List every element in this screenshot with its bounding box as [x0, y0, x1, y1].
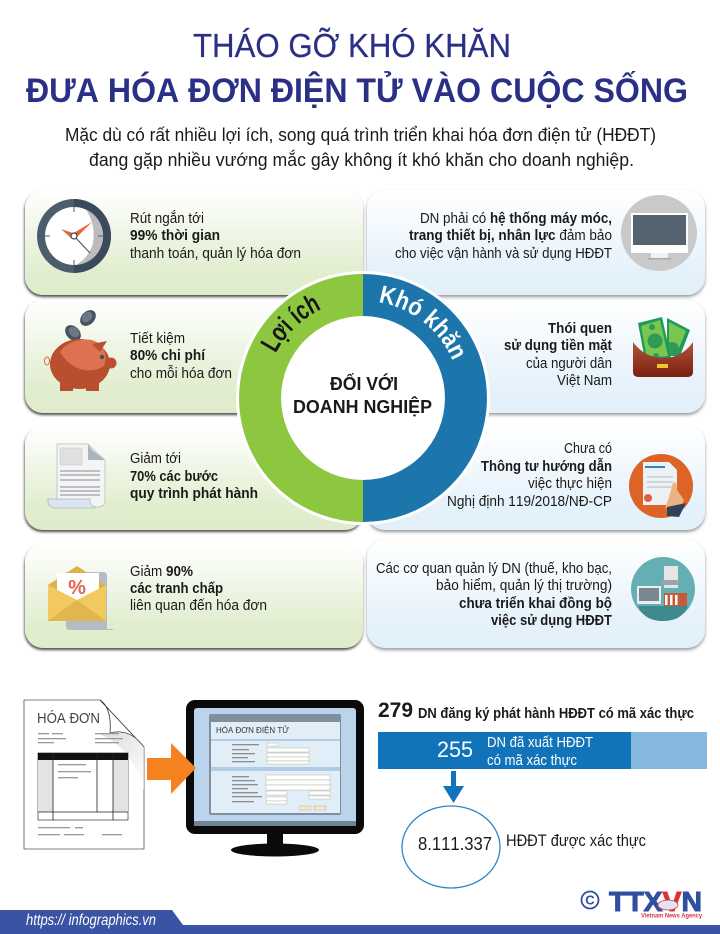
benefit text: 99% thời gian	[130, 228, 220, 244]
benefit text: Giảm 90%	[130, 564, 193, 580]
difficulty text: Các cơ quan quản lý DN (thuế, kho bạc,	[376, 561, 612, 577]
difficulty text: Thông tư hướng dẫn	[481, 458, 612, 475]
difficulty text: chưa triển khai đồng bộ	[459, 596, 612, 612]
title: THÁO GỠ KHÓ KHĂN	[193, 27, 511, 65]
difficulty text: Nghị định 119/2018/NĐ-CP	[447, 494, 612, 510]
logo: TTXVN: TTXVN	[609, 886, 702, 917]
title	[26, 27, 688, 110]
benefit text	[130, 210, 301, 262]
intro text: đang gặp nhiều vướng mắc gây không ít khó khăn cho doanh nghiệp.	[89, 149, 634, 170]
intro text: Mặc dù có rất nhiều lợi ích, song quá trình triển khai hóa đơn điện tử (HĐĐT)	[65, 124, 656, 145]
difficulty text: Chưa có	[564, 441, 612, 457]
benefit text: các tranh chấp	[130, 581, 223, 597]
panel: benefit cost	[25, 300, 363, 413]
arrow: paper to digital	[147, 743, 196, 794]
panel: benefit process	[25, 426, 363, 530]
icon: clock	[37, 199, 111, 273]
stat: verified invoices: 8.111.337	[418, 833, 492, 854]
footer: https:// infographics.vn	[26, 912, 156, 929]
benefit text: quy trình phát hành	[130, 486, 258, 502]
center text: ĐỐI VỚI	[330, 373, 398, 394]
center ring	[236, 271, 490, 525]
icon: document in orange circle	[629, 454, 693, 518]
difficulty text: trang thiết bị, nhân lực đảm bảo	[409, 228, 612, 244]
difficulty text: cho việc vận hành và sử dụng HĐĐT	[395, 246, 612, 262]
icon: paper invoice: HÓA ĐƠN	[37, 710, 100, 727]
stat bar: có mã xác thực	[487, 753, 577, 769]
icon: wallet with cash	[633, 317, 693, 377]
footer	[0, 910, 720, 934]
label: benefits: Lợi ích	[260, 296, 320, 352]
benefit text: Tiết kiệm	[130, 331, 185, 347]
stat: registered businesses: DN đăng ký phát hành HĐĐT có mã xác thực	[418, 706, 694, 722]
difficulty text: sử dụng tiền mặt	[504, 338, 612, 354]
stat bar: DN đã xuất HĐĐT	[487, 735, 593, 751]
icon: document	[48, 444, 105, 508]
benefit text: cho mỗi hóa đơn	[130, 365, 232, 382]
title: ĐƯA HÓA ĐƠN ĐIỆN TỬ VÀO CUỘC SỐNG	[26, 70, 688, 110]
difficulty text	[447, 441, 612, 510]
benefit text: 70% các bước	[130, 469, 218, 485]
difficulty text: của người dân	[526, 356, 612, 372]
panel: difficulty cash	[367, 300, 705, 413]
benefit text: Rút ngắn tới	[130, 210, 204, 227]
icon: computer monitor	[621, 195, 697, 271]
difficulty text: Thói quen	[548, 321, 612, 337]
icon: office in teal circle	[631, 557, 695, 621]
benefit text: thanh toán, quản lý hóa đơn	[130, 246, 301, 262]
label: difficulties: Khó khăn	[380, 286, 464, 360]
difficulty text: bảo hiểm, quản lý thị trường)	[436, 578, 612, 594]
stat bar	[378, 732, 707, 769]
icon: monitor with e-invoice form: HÓA ĐƠN ĐIỆN TỬ	[216, 724, 289, 735]
difficulty text: DN phải có hệ thống máy móc,	[420, 211, 612, 227]
panel: benefit time	[25, 190, 363, 295]
stat: verified invoices: HĐĐT được xác thực	[506, 832, 646, 850]
difficulty text: Việt Nam	[557, 373, 612, 389]
stat: registered businesses	[378, 699, 694, 722]
difficulty text	[376, 561, 612, 629]
benefit text: 80% chi phí	[130, 348, 206, 364]
icon: envelope	[48, 566, 113, 630]
center text: DOANH NGHIỆP	[293, 396, 432, 417]
panel: difficulty guidance	[367, 426, 705, 530]
intro text	[65, 124, 656, 170]
stat: registered businesses: 279	[378, 699, 413, 722]
icon: envelope: %	[68, 577, 86, 599]
icon: paper invoice	[24, 700, 144, 849]
difficulty text: việc thực hiện	[528, 476, 612, 492]
icon: monitor with e-invoice form	[186, 700, 364, 856]
stat: verified invoices	[402, 806, 646, 888]
panel: difficulty equipment	[367, 190, 705, 295]
benefit text	[130, 451, 258, 502]
logo: TTXVN: Vietnam News Agency	[641, 912, 702, 920]
benefit text: liên quan đến hóa đơn	[130, 598, 267, 614]
benefit text	[130, 331, 232, 382]
benefit text	[130, 564, 267, 614]
difficulty text	[395, 211, 612, 262]
difficulty text	[504, 321, 612, 389]
icon: piggy bank	[44, 307, 116, 391]
stat bar: 255	[437, 737, 473, 762]
arrow: down	[443, 771, 464, 803]
difficulty text: việc sử dụng HĐĐT	[491, 613, 612, 629]
panel: benefit disputes	[25, 544, 363, 648]
logo: TTXVN: C	[585, 892, 595, 908]
center text	[293, 373, 432, 417]
panel: difficulty agencies	[367, 540, 705, 648]
benefit text: Giảm tới	[130, 451, 181, 467]
